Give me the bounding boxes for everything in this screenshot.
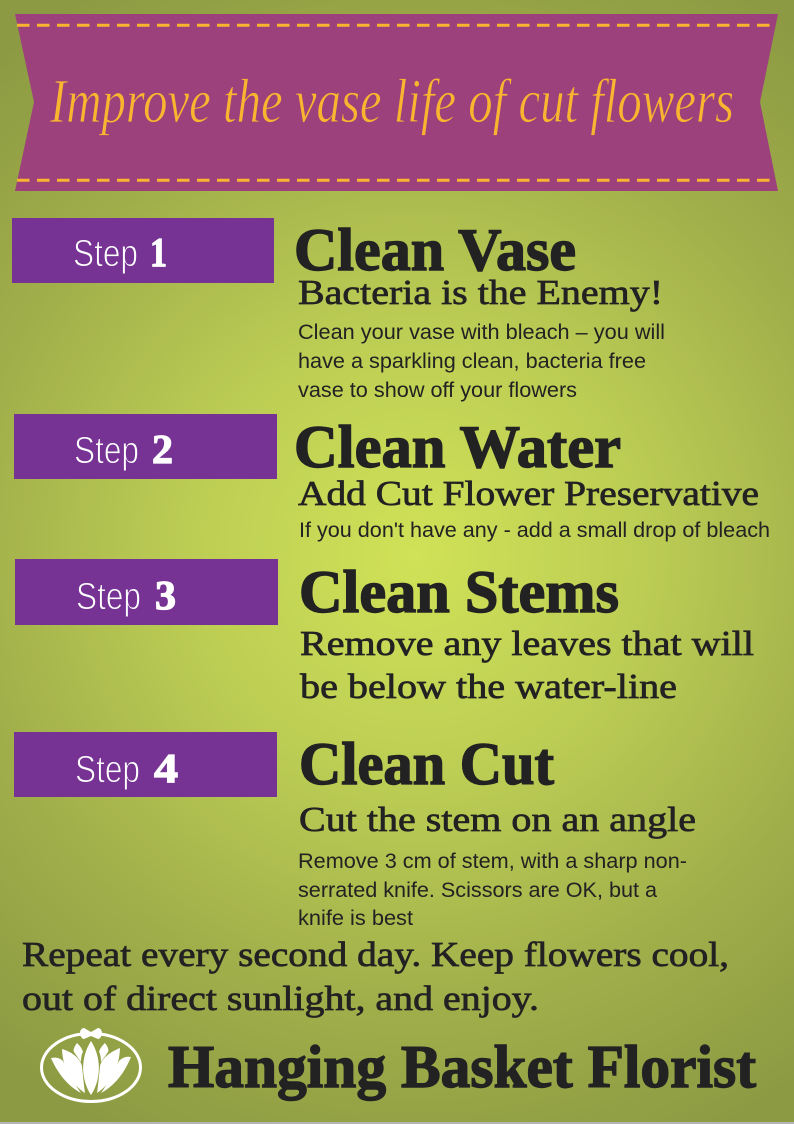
- step 2 heading: Clean Water: [294, 414, 621, 480]
- step 4 body: serrated knife. Scissors are OK, but a: [298, 879, 657, 902]
- step 4 body: Remove 3 cm of stem, with a sharp non-: [298, 850, 687, 873]
- step 3 label: 3: [155, 572, 176, 618]
- step 4 body: knife is best: [298, 907, 413, 930]
- step 4 body: [298, 850, 687, 930]
- step 2 label: 2: [152, 426, 173, 472]
- step 1 body: [298, 321, 665, 402]
- step 2 label: [14, 414, 277, 479]
- step 1 label: 1: [150, 229, 167, 275]
- step 4 heading: Clean Cut: [299, 731, 554, 797]
- step 2 body: If you don't have any - add a small drop of bleach: [299, 519, 770, 542]
- closing note: out of direct sunlight, and enjoy.: [22, 979, 539, 1018]
- step 1 body: vase to show off your flowers: [298, 379, 577, 402]
- step 3 subheading: be below the water-line: [300, 667, 677, 706]
- closing note: [22, 935, 729, 1018]
- step 1 body: have a sparkling clean, bacteria free: [298, 350, 646, 373]
- step 2 label: Step: [74, 430, 139, 472]
- brand name: Hanging Basket Florist: [168, 1034, 756, 1100]
- step 1 heading: Clean Vase: [294, 217, 576, 283]
- step 4 subheading: Cut the stem on an angle: [299, 800, 696, 839]
- step 4 label: [14, 732, 277, 797]
- step 2 subheading: Add Cut Flower Preservative: [298, 474, 759, 513]
- step 1 label: Step: [73, 233, 138, 275]
- closing note: Repeat every second day. Keep flowers cool,: [22, 935, 729, 974]
- step 1 body: Clean your vase with bleach – you will: [298, 321, 665, 344]
- step 3 label: Step: [76, 576, 141, 618]
- icon: lotus logo: [42, 1028, 140, 1102]
- step 1 subheading: Bacteria is the Enemy!: [298, 273, 663, 312]
- step 4 label: 4: [154, 745, 178, 791]
- step 3 heading: Clean Stems: [299, 559, 619, 625]
- step 3 subheading: Remove any leaves that will: [300, 624, 754, 663]
- step 4 label: Step: [75, 749, 140, 791]
- title banner: [15, 14, 778, 191]
- step 3 subheading: [300, 624, 754, 706]
- step 1 label: [12, 218, 274, 283]
- step 3 label: [15, 559, 278, 625]
